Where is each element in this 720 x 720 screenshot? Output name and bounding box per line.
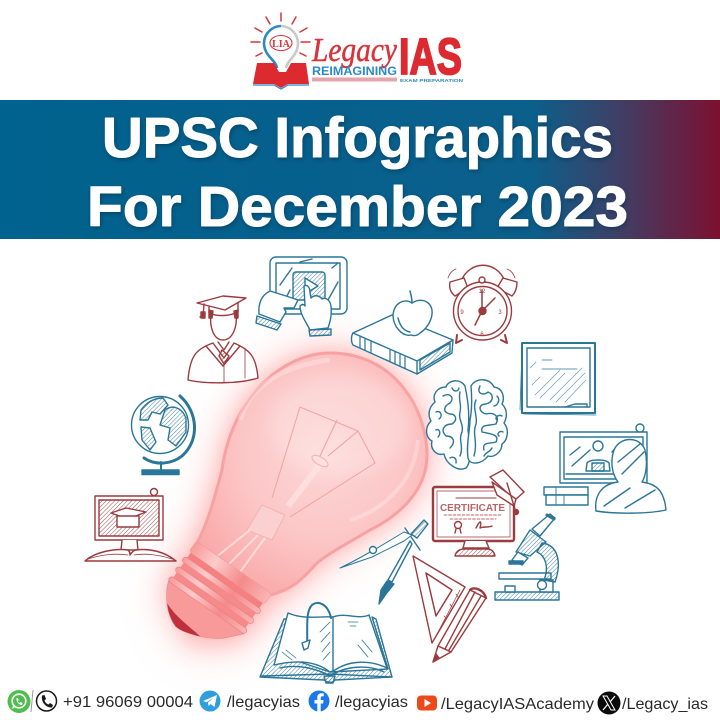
icon: graduate with cap [188,296,258,383]
screw base [149,540,273,662]
icon: separator slash [31,690,33,712]
icon: drawing compass [340,520,428,604]
bulb inner glow [165,353,427,645]
icon: tablet with touching hands [256,257,347,336]
footer contact bar [8,690,708,714]
icon: globe [132,396,195,474]
contact tip [159,604,205,642]
logo wordmark: REIMAGINING: REIMAGINING [312,64,397,78]
stacked books [544,487,588,495]
play button [293,272,325,300]
facebook handle: /legacyias [335,694,408,711]
central glowing lightbulb [149,353,427,662]
icon: alarm clock: 6 [480,332,484,338]
icon: alarm clock: 3 [498,310,502,316]
icon: set square and pencil [413,556,486,662]
left hand [259,291,298,322]
icon: alarm clock: 12 [479,289,486,295]
icon: telegram [200,690,220,712]
icon: certificate on monitor [433,470,524,556]
icon: microscope [495,514,559,600]
logo wordmark: IAS: IAS [399,28,462,85]
bulb outer glow [165,353,427,645]
phone number: +91 96069 00004 [63,694,193,711]
icon: facebook [308,690,330,712]
icon: whatsapp [8,690,30,713]
title banner [0,100,720,239]
icon: open book with bookmark [260,603,392,683]
icon: computer on open book [85,488,176,561]
base cap [149,581,244,661]
telegram handle: /legacyias [227,694,300,711]
title line 2: For December 2023 [87,175,628,239]
graduation cap [490,470,524,500]
icon: chalkboard [520,343,596,415]
glass highlight [268,375,412,475]
icon: alarm clock [448,265,517,343]
icon: brain [427,380,507,469]
title line 1: UPSC Infographics [102,106,613,170]
icon: video call with student [544,424,666,513]
logo tagline: EXAM PREPARATION [400,78,464,84]
certificate text: CERTIFICATE [440,502,505,514]
video tutor [593,441,603,451]
student [596,440,666,513]
youtube handle: /LegacyIASAcademy [441,696,594,713]
logo: Legacy IAS [251,13,464,89]
right hand [300,285,331,330]
X handle: /Legacy_ias [622,696,708,713]
logo icon: lightbulb on book: LIA [272,39,291,50]
icon: youtube [417,696,437,710]
logo icon: lightbulb on book [251,13,310,89]
icon: X [598,692,620,714]
icon: apple on book [352,291,453,374]
icon: alarm clock: 9 [460,310,464,316]
logo wordmark: Legacy: Legacy [311,32,398,69]
logo underline [312,78,397,82]
filament [215,407,375,572]
bulb glass [197,353,427,595]
icon: phone [36,691,56,711]
